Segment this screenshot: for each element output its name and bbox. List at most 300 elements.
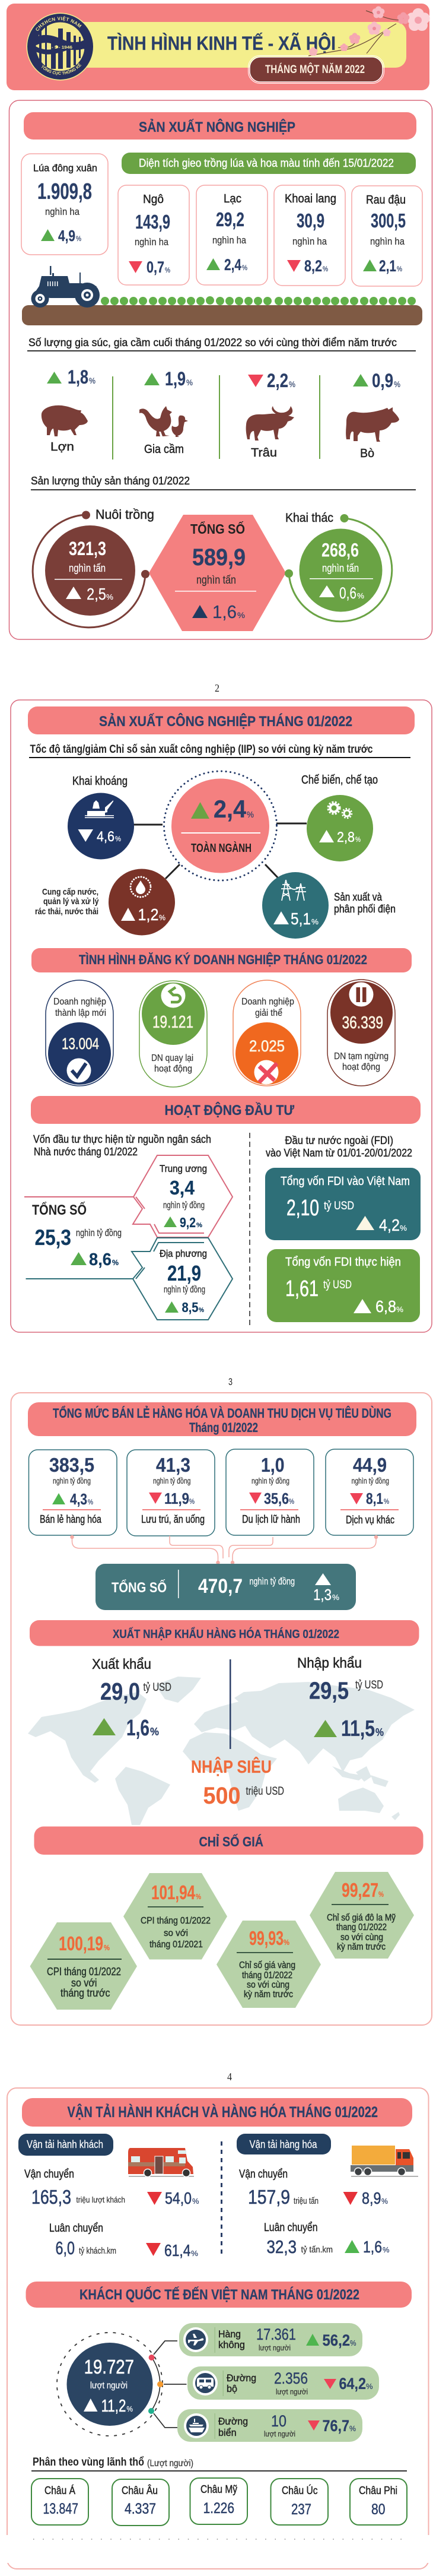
investment: state budget: Nhà nước tháng 01/2022 — [34, 1146, 138, 1158]
sector: mining — [68, 775, 134, 860]
row: air: không — [218, 2339, 245, 2350]
livestock: pig: Lợn — [50, 441, 74, 454]
total investment: 25,3 — [34, 1225, 71, 1250]
card: peanut — [196, 185, 268, 285]
total retail — [95, 1564, 356, 1610]
icon: cross — [254, 1060, 279, 1084]
heading: industrial production — [28, 706, 415, 734]
region: Asia — [31, 2479, 88, 2525]
livestock: buffalo: Trâu — [251, 446, 277, 460]
card: other services: 44,9 — [353, 1454, 387, 1476]
total retail: TỔNG SỐ — [112, 1579, 167, 1596]
hexagon: CPI vs same month last year: so với — [164, 1928, 188, 1938]
freight transport: Vận chuyển — [239, 2168, 288, 2181]
livestock: poultry: % — [186, 378, 193, 387]
total retail: % — [332, 1593, 339, 1602]
heading: agriculture: SẢN XUẤT NÔNG NGHIỆP — [139, 118, 295, 135]
fishery: aquaculture: % — [106, 592, 113, 601]
hexagon: CPI vs previous month: % — [104, 1943, 110, 1952]
sector: water and waste — [35, 869, 175, 936]
hexagon: local: 21,9 — [167, 1261, 201, 1285]
hexagon: gold price index: 99,93 — [249, 1927, 284, 1949]
passenger transport: 165,3 — [31, 2186, 71, 2208]
card: registered FDI — [265, 1168, 421, 1240]
total retail: 1,3 — [313, 1586, 332, 1604]
region: America — [190, 2478, 247, 2524]
enterprise: suspended — [327, 980, 395, 1086]
card: retail: 4,3 — [70, 1490, 87, 1508]
passenger transport: triệu lượt khách — [76, 2195, 125, 2204]
title: TÌNH HÌNH KINH TẾ - XÃ HỘI — [107, 33, 336, 54]
header banner — [7, 4, 430, 90]
imports: % — [375, 1726, 384, 1738]
row: air: Hàng — [218, 2328, 241, 2340]
heading: foreign trade — [30, 1620, 419, 1646]
date pill: THÁNG MỘT NĂM 2022 — [265, 63, 365, 76]
connector lines — [133, 823, 307, 879]
card: peanut: Lạc — [224, 192, 241, 205]
heading: international visitors: KHÁCH QUỐC TẾ ĐẾN VIỆT NAM THÁNG 01/2022 — [79, 2286, 359, 2303]
card: travel — [226, 1449, 314, 1535]
total investment: 8,6 — [89, 1250, 112, 1269]
card: corn: nghìn ha — [135, 236, 168, 248]
row: road: lượt người — [276, 2387, 308, 2396]
icon: oil rig — [85, 800, 114, 818]
title band — [77, 22, 406, 68]
enterprise: newly established: 13.004 — [62, 1035, 99, 1053]
icon: statistics office logo — [26, 13, 93, 81]
trade deficit — [191, 1757, 284, 1809]
hexagon: central: 3,4 — [170, 1177, 195, 1199]
freight transport: 8,9 — [362, 2189, 381, 2207]
fishery: capture: % — [357, 591, 364, 600]
imports: tỷ USD — [355, 1679, 383, 1691]
hexagon: CPI vs same month last year: % — [196, 1892, 201, 1901]
date pill — [248, 56, 384, 83]
sector: water and waste: Cung cấp nước, — [42, 887, 98, 897]
heading: livestock: Số lượng gia súc, gia cầm cuối tháng 01/2022 so với cùng thời điểm năm trước — [28, 337, 397, 348]
hexagon: local: Địa phương — [160, 1248, 207, 1259]
heading: agriculture — [24, 112, 416, 140]
hexagon: US dollar index: so với cùng — [340, 1932, 383, 1943]
card: retail — [28, 1450, 117, 1535]
hexagon: central: 9,2 — [180, 1215, 196, 1230]
trade deficit: NHẬP SIÊU — [191, 1757, 272, 1777]
panel: agriculture — [9, 100, 432, 639]
card: sweet potato: % — [323, 265, 328, 273]
subheading: planted area: Diện tích gieo trồng lúa và hoa màu tính đến 15/01/2022 — [139, 157, 394, 170]
heading: business registration — [31, 948, 412, 972]
heading: by region: (Lượt người) — [147, 2458, 193, 2469]
exports: % — [150, 1726, 159, 1738]
sector: mining: % — [115, 835, 121, 843]
sector: manufacturing: % — [355, 835, 361, 844]
icon: bus — [128, 2148, 194, 2176]
investment: FDI: vào Việt Nam từ 01/01-20/01/2022 — [266, 1147, 412, 1159]
icon: plane — [183, 2327, 208, 2352]
card: sweet potato: Khoai lang — [285, 192, 336, 205]
freight transport — [237, 2134, 418, 2257]
card: accommodation and food: % — [189, 1497, 195, 1506]
freight transport: tỷ tấn.km — [301, 2245, 333, 2255]
chart: whole industry: % — [247, 810, 254, 820]
enterprise: dissolved: 2.025 — [249, 1037, 285, 1055]
passenger transport: 61,4 — [164, 2241, 191, 2260]
passenger transport: tỷ khách.km — [79, 2246, 116, 2256]
row: road: % — [366, 2382, 373, 2391]
ground — [22, 305, 422, 325]
region: Australia — [270, 2479, 328, 2525]
sector: electricity: 5,1 — [291, 910, 311, 928]
card: peanut: nghìn ha — [212, 235, 246, 246]
heading: industrial production: SẢN XUẤT CÔNG NGHIỆP THÁNG 01/2022 — [99, 712, 352, 730]
sector: water and waste: % — [159, 913, 165, 922]
card: travel: nghìn tỷ đồng — [251, 1476, 289, 1485]
page number 3: 3 — [228, 1376, 233, 1387]
trade deficit: triệu USD — [246, 1785, 284, 1798]
livestock: poultry: Gia cầm — [144, 443, 184, 456]
card: vegetables — [352, 186, 422, 286]
hexagon: US dollar index: 99,27 — [342, 1879, 378, 1901]
icon: pause — [349, 982, 374, 1007]
row: sea: % — [349, 2424, 356, 2433]
fishery: total hexagon: nghìn tấn — [196, 574, 236, 587]
sector: manufacturing: 2,8 — [337, 829, 355, 845]
enterprise: suspended: 36.339 — [342, 1013, 383, 1032]
hexagon: CPI vs previous month: so với — [71, 1977, 97, 1989]
row: sea: lượt người — [264, 2429, 295, 2438]
passenger transport: % — [192, 2197, 199, 2206]
icon: van — [193, 2371, 218, 2396]
livestock: cow: Bò — [360, 447, 374, 460]
row: road: Đường — [227, 2372, 256, 2384]
connector lines — [154, 2341, 186, 2428]
freight transport: triệu tấn — [294, 2196, 319, 2206]
heading: foreign trade: XUẤT NHẬP KHẨU HÀNG HÓA THÁNG 01/2022 — [113, 1627, 339, 1641]
hexagon: CPI vs previous month: tháng trước — [61, 1987, 110, 1999]
hexagon: local: nghìn tỷ đồng — [164, 1285, 205, 1295]
icon: return arrow — [161, 983, 185, 1008]
icon: pig — [42, 405, 88, 436]
region: Asia: Châu Á — [44, 2485, 75, 2496]
row: air: 17.361 — [256, 2325, 296, 2343]
hexagon: CPI vs same month last year: CPI tháng 01/2022 — [141, 1916, 211, 1926]
livestock: cow: % — [394, 379, 400, 389]
sector: manufacturing — [301, 774, 378, 861]
region: Australia: Châu Úc — [282, 2484, 318, 2496]
heading: business registration: TÌNH HÌNH ĐĂNG KÝ DOANH NGHIỆP THÁNG 01/2022 — [79, 952, 367, 967]
total investment: TỔNG SỐ — [32, 1202, 87, 1218]
total investment: nghìn tỷ đồng — [76, 1227, 122, 1238]
enterprise: resumed operation — [139, 981, 207, 1087]
row: sea — [177, 2409, 362, 2442]
heading: retail sales: Tháng 01/2022 — [189, 1420, 258, 1435]
region: Europe: 4.337 — [125, 2501, 156, 2517]
panel: industry, enterprises and investment — [11, 700, 432, 1332]
icon: buffalo — [246, 406, 294, 441]
card: winter-spring rice: 4,9 — [58, 227, 75, 245]
row: air: % — [350, 2339, 356, 2347]
sector: water and waste: rác thải, nước thải — [35, 907, 98, 917]
row: road: 64,2 — [339, 2375, 366, 2393]
card: vegetables: 2,1 — [379, 257, 396, 275]
card: winter-spring rice: nghìn ha — [45, 206, 79, 217]
enterprise: newly established — [46, 980, 113, 1086]
hexagon: local: % — [199, 1307, 204, 1314]
chart: whole industry — [164, 771, 276, 880]
card: travel: Du lịch lữ hành — [242, 1513, 300, 1525]
row: sea: 10 — [271, 2412, 286, 2430]
card: corn: 0,7 — [147, 258, 164, 276]
passenger transport: % — [191, 2249, 198, 2258]
card: vegetables: 300,5 — [371, 210, 406, 232]
investment: state budget: Vốn đầu tư thực hiện từ nguồn ngân sách — [33, 1133, 211, 1145]
card: winter-spring rice — [21, 154, 108, 255]
fishery: capture: Khai thác — [285, 511, 333, 525]
hexagon: US dollar index: kỳ năm trước — [337, 1942, 386, 1952]
heading: price indices: CHỈ SỐ GIÁ — [199, 1833, 263, 1849]
fishery: aquaculture — [33, 507, 154, 628]
fishery: aquaculture: nghìn tấn — [69, 562, 106, 574]
card: accommodation and food — [127, 1450, 215, 1536]
panel: transport and tourism — [5, 2088, 432, 2569]
icon: check mark — [66, 1058, 91, 1083]
icon: peach blossom branch — [308, 6, 430, 56]
sector: manufacturing: Chế biến, chế tạo — [301, 774, 378, 787]
hexagon: central: Trung ương — [160, 1163, 207, 1174]
icon: ship — [184, 2413, 209, 2438]
row: sea: biển — [218, 2427, 237, 2438]
exports: 29,0 — [100, 1678, 140, 1705]
icon: statistics office logo: 6 - 5 - 1946 — [47, 45, 72, 50]
card: disbursed FDI: % — [396, 1305, 403, 1314]
livestock: buffalo: 2,2 — [267, 370, 288, 391]
fishery: capture — [285, 511, 392, 622]
card: corn: Ngô — [143, 193, 164, 206]
livestock: pig — [42, 366, 95, 454]
page number 2: 2 — [215, 682, 219, 694]
fishery: capture: 0,6 — [339, 584, 356, 602]
card: disbursed FDI: tỷ USD — [323, 1279, 352, 1291]
heading: international visitors — [26, 2282, 412, 2308]
sector: electricity: Sản xuất và — [334, 891, 383, 903]
card: winter-spring rice: % — [76, 235, 81, 243]
card: accommodation and food: 41,3 — [156, 1454, 190, 1476]
hexagon: central: nghìn tỷ đồng — [163, 1200, 205, 1211]
fishery: capture: 268,6 — [321, 539, 359, 560]
panel: retail, trade and prices — [11, 1393, 432, 2025]
livestock: poultry: 1,9 — [165, 368, 186, 389]
hexagon: local: 8,5 — [182, 1300, 199, 1315]
card: corn: % — [165, 266, 170, 274]
freight transport: Luân chuyển — [264, 2222, 318, 2234]
exports: 1,6 — [126, 1716, 149, 1741]
icon: tractor — [31, 266, 100, 308]
sector: electricity — [262, 872, 396, 939]
heading: fishery output: Sản lượng thủy sản tháng 01/2022 — [31, 475, 190, 487]
imports: 11,5 — [341, 1716, 375, 1741]
passenger transport: Luân chuyển — [49, 2222, 103, 2235]
hexagon: US dollar index: thang 01/2022 — [336, 1922, 387, 1932]
card: vegetables: % — [397, 265, 402, 273]
icon: rooster and duck — [139, 406, 188, 437]
passenger transport: Vận chuyển — [24, 2168, 74, 2181]
chart: total visitors: lượt người — [90, 2381, 128, 2391]
card: corn — [118, 185, 189, 285]
sector: water and waste: 1,2 — [138, 905, 159, 924]
region: Australia: 237 — [291, 2501, 311, 2518]
icon: statistics office logo: TỔNG CỤC THỐNG KÊ — [42, 63, 82, 75]
hexagon: local — [26, 1238, 233, 1320]
row: air — [179, 2323, 362, 2356]
investment: FDI: Đầu tư nước ngoài (FDI) — [285, 1135, 393, 1146]
card: other services: nghìn tỷ đồng — [351, 1476, 389, 1485]
card: corn: 143,9 — [135, 211, 170, 233]
card: winter-spring rice: 1.909,8 — [37, 179, 92, 204]
investment: state budget — [24, 1133, 233, 1320]
card: peanut: 2,4 — [224, 256, 241, 274]
card: disbursed FDI: Tổng vốn FDI thực hiện — [285, 1256, 401, 1269]
card: peanut: % — [242, 264, 247, 272]
passenger transport: 54,0 — [165, 2189, 192, 2207]
row: road: bộ — [227, 2383, 237, 2394]
icon: gears — [328, 802, 352, 818]
enterprise: resumed operation: DN quay lại — [151, 1053, 193, 1063]
enterprise: newly established: Doanh nghiệp — [53, 997, 106, 1007]
sector: mining: 4,6 — [97, 829, 114, 845]
hexagon: gold price index: Chỉ số giá vàng — [239, 1960, 295, 1970]
total investment: % — [112, 1258, 119, 1267]
heading: investment: HOẠT ĐỘNG ĐẦU TƯ — [165, 1102, 294, 1119]
hexagon: gold price index: tháng 01/2022 — [242, 1970, 292, 1981]
icon: statistics office logo: CHXHCN VIỆT NAM — [36, 16, 82, 31]
card: sweet potato: nghìn ha — [292, 236, 327, 247]
card: peanut: 29,2 — [216, 208, 244, 230]
hexagon: US dollar index — [310, 1872, 414, 1959]
row: sea: 76,7 — [323, 2417, 349, 2435]
card: registered FDI: 4,2 — [379, 1216, 400, 1234]
region: Europe — [112, 2479, 169, 2526]
passenger transport — [18, 2134, 199, 2260]
fishery: aquaculture: 321,3 — [69, 538, 106, 559]
enterprise: resumed operation: 19.121 — [152, 1013, 193, 1032]
heading: investment — [31, 1096, 421, 1124]
freight transport: % — [383, 2245, 390, 2254]
fishery: total hexagon: TỔNG SỐ — [190, 521, 245, 537]
hexagon: CPI vs previous month: 100,19 — [59, 1932, 103, 1954]
enterprise: dissolved: Doanh nghiệp — [241, 997, 294, 1007]
card: travel: 1,0 — [261, 1454, 285, 1476]
card: retail: 383,5 — [49, 1454, 94, 1476]
chart: total visitors: 11,2 — [101, 2397, 126, 2416]
card: registered FDI: 2,10 — [286, 1196, 319, 1221]
total retail: 470,7 — [198, 1575, 243, 1598]
card: vegetables: nghìn ha — [370, 236, 405, 247]
fishery: capture: nghìn tấn — [322, 562, 359, 574]
freight transport: % — [381, 2197, 388, 2206]
imports — [297, 1655, 384, 1741]
card: retail: nghìn tỷ đồng — [53, 1476, 91, 1485]
hexagon: CPI vs previous month: CPI tháng 01/2022 — [47, 1966, 121, 1978]
livestock: buffalo — [246, 370, 295, 460]
sector: mining: Khai khoáng — [72, 775, 128, 788]
card: travel: 35,6 — [264, 1490, 289, 1507]
imports: Nhập khẩu — [297, 1655, 362, 1671]
card: other services: Dịch vụ khác — [346, 1514, 394, 1526]
row: road: 2.356 — [274, 2369, 308, 2387]
sector: water and waste: quản lý và xử lý — [43, 896, 99, 907]
heading: by region — [31, 2456, 407, 2472]
fishery: aquaculture: 2,5 — [87, 585, 106, 603]
livestock: cow — [346, 370, 400, 460]
fishery: total hexagon: 589,9 — [192, 544, 246, 571]
passenger transport: 6,0 — [56, 2238, 75, 2258]
connector arrows — [71, 1535, 377, 1564]
fishery: aquaculture: Nuôi trồng — [95, 507, 154, 522]
imports: 29,5 — [309, 1677, 349, 1704]
exports: tỷ USD — [144, 1681, 171, 1694]
card: sweet potato: 8,2 — [304, 257, 322, 275]
hexagon: gold price index — [216, 1921, 321, 2008]
fishery: total hexagon: % — [237, 610, 245, 620]
card: sweet potato: 30,9 — [297, 210, 324, 232]
chart: whole industry: TOÀN NGÀNH — [191, 841, 251, 855]
hexagon: CPI vs previous month — [30, 1922, 137, 2010]
chart: whole industry: 2,4 — [214, 795, 247, 823]
card: other services — [326, 1449, 413, 1535]
row: road — [187, 2366, 379, 2400]
row: air: lượt người — [259, 2343, 291, 2352]
hexagon: CPI vs same month last year: 101,94 — [151, 1881, 195, 1903]
livestock: pig: % — [89, 376, 95, 385]
hexagon: US dollar index: Chỉ số giá đô la Mỹ — [327, 1913, 396, 1923]
card: accommodation and food: Lưu trú, ăn uống — [141, 1513, 205, 1525]
card: retail: % — [88, 1498, 93, 1506]
enterprise: newly established: thành lập mới — [55, 1008, 106, 1018]
card: accommodation and food: nghìn tỷ đồng — [153, 1476, 191, 1485]
sector: electricity: % — [311, 917, 319, 926]
chart: total visitors: 19.727 — [84, 2356, 134, 2378]
livestock: pig: 1,8 — [68, 366, 88, 388]
trade deficit: 500 — [203, 1783, 241, 1809]
enterprise: dissolved — [233, 980, 301, 1086]
freight transport: 1,6 — [363, 2238, 382, 2256]
passenger transport: Vận tải hành khách — [27, 2138, 103, 2150]
card: sweet potato — [274, 185, 345, 286]
region: Africa: Châu Phi — [359, 2485, 397, 2496]
enterprise: suspended: DN tạm ngừng — [334, 1051, 389, 1062]
card: registered FDI: Tổng vốn FDI vào Việt Nam — [281, 1175, 410, 1188]
icon: power pylons — [281, 880, 306, 901]
region: Africa: 80 — [371, 2501, 386, 2518]
livestock: buffalo: % — [289, 379, 295, 389]
icon: water drop — [130, 877, 151, 897]
total retail: nghìn tỷ đồng — [249, 1576, 295, 1587]
freight transport: Vận tải hàng hóa — [249, 2138, 317, 2150]
card: accommodation and food: 11,9 — [164, 1490, 189, 1507]
card: travel: % — [289, 1497, 294, 1506]
total investment — [32, 1202, 122, 1269]
sector: electricity: phân phối điện — [334, 903, 396, 915]
hexagon: gold price index: so với cùng — [247, 1980, 289, 1990]
heading: by region: Phân theo vùng lãnh thổ — [33, 2456, 144, 2469]
card: winter-spring rice: Lúa đông xuân — [33, 163, 97, 173]
chart: total visitors: % — [127, 2404, 133, 2413]
card: disbursed FDI: 1,61 — [285, 1276, 319, 1301]
heading: retail sales — [28, 1402, 416, 1436]
freight transport: 32,3 — [267, 2236, 297, 2257]
card: disbursed FDI: 6,8 — [375, 1297, 396, 1316]
